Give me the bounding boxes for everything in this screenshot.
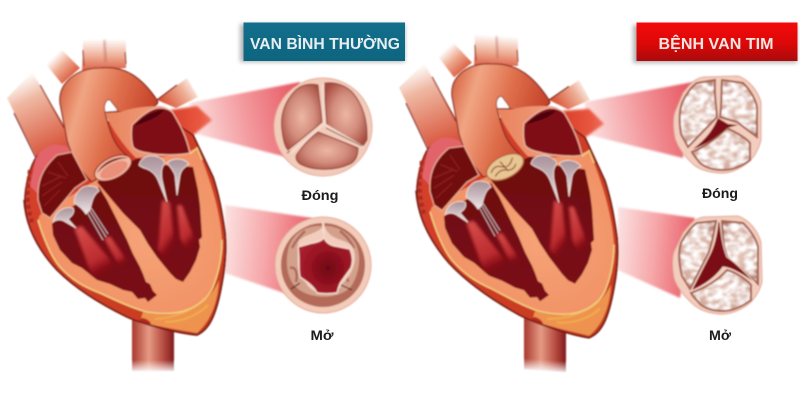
label: diseased open: Mở [709, 327, 731, 343]
label: closed: Đóng [302, 187, 338, 203]
diseased valve open [672, 216, 762, 314]
heart cross-section [7, 39, 226, 373]
heart cross-section diseased [399, 28, 618, 378]
ray to diseased open valve [618, 207, 695, 298]
panel: diseased valve [399, 22, 798, 378]
diseased valve closed [674, 76, 761, 173]
heading: normal valve: VAN BÌNH THƯỜNG [250, 35, 400, 53]
ray to open valve [225, 205, 312, 294]
heading: normal valve [240, 22, 405, 62]
aortic valve healthy [90, 150, 136, 186]
valve closed [274, 78, 372, 176]
label: diseased closed: Đóng [702, 185, 738, 201]
ray to diseased closed valve [585, 82, 693, 158]
label: open: Mở [310, 327, 334, 343]
valve open [275, 217, 371, 313]
heading: valve disease [633, 22, 798, 63]
heading: valve disease: BỆNH VAN TIM [658, 35, 774, 53]
ray to closed valve [190, 82, 300, 158]
panel: normal valve [7, 22, 405, 373]
aortic valve calcified [482, 148, 528, 186]
